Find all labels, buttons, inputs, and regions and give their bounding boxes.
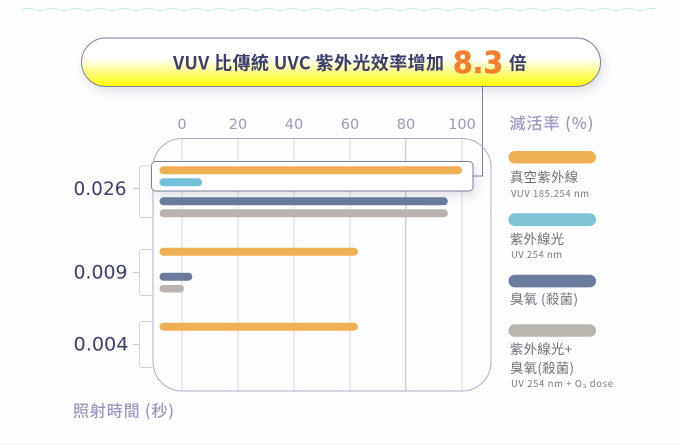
headline pill [82, 38, 600, 86]
x axis labels: 60 [341, 117, 359, 133]
legend: VUV: VUV 185.254 nm [511, 186, 589, 200]
y axis values: 0.009 [74, 262, 128, 284]
legend: UV plus ozone: 紫外線光+ [510, 338, 572, 358]
legend title: 滅活率 (%) [510, 110, 594, 134]
x axis labels [177, 117, 476, 133]
chart plot area [153, 138, 491, 391]
connector line from headline to highlight box [470, 86, 482, 176]
y axis title: 照射時間 (秒) [73, 398, 174, 422]
x axis labels: 0 [177, 117, 187, 133]
headline number: 8.3 [453, 46, 503, 81]
legend: VUV [508, 151, 596, 200]
headline suffix: 倍 [509, 50, 526, 76]
legend: UV plus ozone: 臭氧(殺菌) [510, 357, 574, 377]
legend: UV: UV 254 nm [511, 247, 562, 261]
brackets [133, 166, 152, 368]
x axis labels: 100 [448, 117, 476, 133]
highlight box around top bars [152, 162, 473, 191]
x axis labels: 20 [229, 117, 247, 133]
bar: 0.004 s [160, 323, 358, 331]
bars: 0.026 s [160, 166, 462, 217]
legend: ozone: 臭氧 (殺菌) [510, 288, 578, 308]
legend: VUV: 真空紫外線 [510, 166, 578, 186]
x axis labels: 80 [397, 117, 415, 133]
legend: UV plus ozone: UV 254 nm + O₃ dose [511, 376, 613, 390]
y axis values [74, 179, 128, 356]
legend: UV [508, 213, 596, 261]
headline text: VUV 比傳統 UVC 紫外光效率增加 [172, 50, 444, 76]
legend: ozone [508, 275, 596, 308]
bars: 0.009 s [160, 248, 358, 292]
legend: UV plus ozone [508, 324, 613, 390]
y axis values: 0.004 [74, 334, 128, 356]
y axis values: 0.026 [74, 179, 126, 200]
x axis labels: 40 [285, 117, 303, 133]
legend: UV: 紫外線光 [510, 228, 564, 248]
